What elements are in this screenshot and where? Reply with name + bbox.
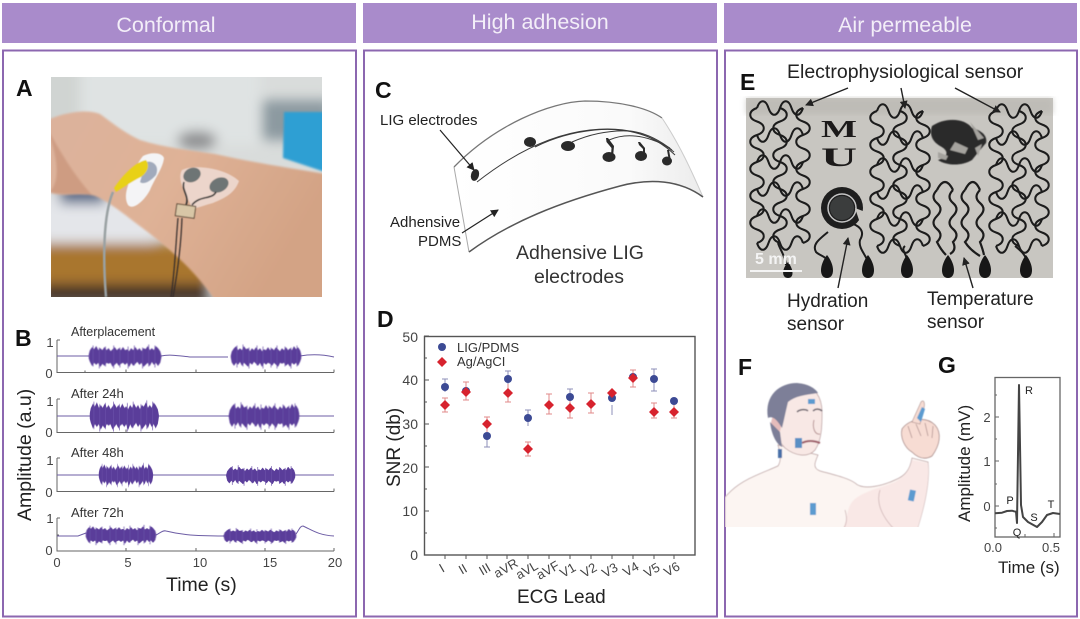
waveform peak labels: S <box>1030 512 1038 524</box>
x category labels: V2 <box>578 560 599 581</box>
trace: after 24h: 0 <box>45 425 53 440</box>
trace: after placement <box>45 325 334 381</box>
panel: high adhesion <box>364 50 717 616</box>
diagram: adhesive LIG electrode patch <box>380 101 703 288</box>
hydration sensor <box>821 187 868 229</box>
x category labels: V3 <box>599 560 620 581</box>
waveform peak labels: Q <box>1013 527 1022 539</box>
y tick labels <box>402 329 418 563</box>
chart: ECG waveform <box>955 378 1060 577</box>
label B: B <box>15 325 32 351</box>
trace: after 24h: 1 <box>46 394 54 409</box>
x category labels: I <box>436 561 447 576</box>
waveform peak labels: T <box>1048 499 1055 511</box>
label C: C <box>375 77 392 103</box>
LIG/PDMS points <box>441 373 678 440</box>
chart: amplitude over time at four wear durations <box>14 325 342 596</box>
rose logo <box>931 120 986 165</box>
sensor label: temperature: sensor <box>927 312 985 333</box>
callout: adhensive PDMS: Adhensive <box>390 214 460 231</box>
legend: Ag/AgCI <box>457 354 505 369</box>
heading: Air permeable: Air permeable <box>838 13 972 37</box>
label F: F <box>738 354 752 380</box>
Ag/AgCl points <box>440 373 679 454</box>
y axis title: SNR (db) <box>384 408 405 487</box>
chart: SNR per ECG lead <box>384 329 695 608</box>
serpentine tails and pads <box>778 222 1027 265</box>
diagram: adhesive LIG electrode patch: electrodes <box>534 266 624 288</box>
caption: Adhensive LIG <box>516 242 644 264</box>
sensor label: temperature: Temperature <box>927 289 1034 310</box>
y tick labels <box>983 410 991 514</box>
x category labels: aVF <box>534 558 562 583</box>
temperature sensor <box>934 182 984 256</box>
y tick labels: 1 <box>983 454 991 469</box>
heading: High adhesion: High adhesion <box>471 10 609 34</box>
x category labels: V6 <box>661 559 682 580</box>
electrophysiological meshes <box>750 101 810 250</box>
x axis title: Time (s) <box>166 574 237 596</box>
y tick labels: 50 <box>402 329 418 345</box>
x axis tick labels <box>53 555 342 570</box>
y axis title: Amplitude (mV) <box>955 405 974 522</box>
x axis tick labels: 20 <box>328 555 342 570</box>
trace: after placement: Afterplacement <box>71 325 156 339</box>
waveform peak labels: P <box>1006 495 1014 507</box>
blue sensors <box>778 399 925 515</box>
photo: printed sensor array: U <box>821 143 857 172</box>
trace: after 72h: After 72h <box>71 505 124 520</box>
y tick labels: 2 <box>983 410 991 425</box>
trace: after 72h: 1 <box>46 511 54 526</box>
x tick labels: 0.0 <box>984 540 1002 555</box>
hand <box>902 419 939 458</box>
label D: D <box>377 306 394 332</box>
photo: forearm with electrodes <box>51 77 322 297</box>
trace: after 24h: After 24h <box>71 386 124 401</box>
panel: air permeable <box>725 50 1077 616</box>
y tick labels: 10 <box>402 503 418 519</box>
trace: after 48h: 1 <box>46 453 54 468</box>
x axis title: Time (s) <box>998 558 1060 577</box>
label G: G <box>938 352 956 378</box>
x category labels: III <box>476 560 493 578</box>
head <box>780 392 823 456</box>
trace: after 72h: 0 <box>45 543 53 558</box>
panel: conformal <box>3 50 356 616</box>
hair <box>767 383 818 428</box>
sensor label: electrophysiological <box>787 61 1024 112</box>
legend <box>437 340 519 369</box>
x category labels: V4 <box>620 559 641 580</box>
x axis tick labels: 0 <box>53 555 61 570</box>
sensor label: hydration: sensor <box>787 314 845 335</box>
y tick labels: 20 <box>402 460 418 476</box>
y tick labels: 30 <box>402 416 418 432</box>
callout: adhensive PDMS: PDMS <box>418 233 461 250</box>
trace: after 48h: After 48h <box>71 445 124 460</box>
x category labels: V1 <box>557 560 578 581</box>
waveform peak labels <box>1006 385 1055 539</box>
sensor label: electrophysiological: Electrophysiological sensor <box>787 61 1024 83</box>
heading: High adhesion <box>363 3 717 43</box>
y axis title: Amplitude (a.u) <box>14 389 36 521</box>
y tick labels: 40 <box>402 372 418 388</box>
trace: after 72h <box>45 505 334 558</box>
heading: Conformal <box>2 3 356 43</box>
heading: Conformal: Conformal <box>116 13 216 37</box>
x category labels: V5 <box>641 560 662 581</box>
sensor label: hydration: Hydration <box>787 291 868 312</box>
legend: LIG/PDMS <box>457 340 519 355</box>
traces <box>477 129 675 182</box>
x category labels: II <box>456 561 470 577</box>
x category labels: aVR <box>491 555 520 581</box>
error bars <box>442 369 677 447</box>
photo: printed sensor array <box>746 98 1053 278</box>
x category labels: aVL <box>513 558 541 582</box>
MU logo: M <box>821 117 857 143</box>
label E: E <box>740 69 755 95</box>
label A: A <box>16 75 33 101</box>
sensor label: temperature <box>927 258 1034 333</box>
facial features <box>797 409 822 412</box>
x category labels <box>436 555 682 583</box>
music-note electrodes <box>470 137 672 182</box>
ear and neck shade <box>770 418 782 432</box>
x tick labels: 0.5 <box>1042 540 1060 555</box>
scale bar: 5 mm <box>755 251 797 268</box>
trace: after 48h <box>45 445 334 500</box>
x axis tick labels: 5 <box>124 555 132 570</box>
x tick labels <box>984 540 1060 555</box>
callout: LIG electrodes <box>380 112 478 170</box>
illustration: man wearing sensors <box>725 383 939 530</box>
callout: adhensive PDMS <box>390 210 498 250</box>
y tick labels: 0 <box>983 499 991 514</box>
trace: after placement: 0 <box>45 366 53 381</box>
ECG trace <box>995 385 1060 527</box>
waveform peak labels: R <box>1025 385 1033 397</box>
y tick labels: 0 <box>410 547 418 563</box>
trace: after 24h <box>45 386 334 440</box>
sensor label: hydration <box>787 238 868 335</box>
x axis tick labels: 15 <box>263 555 277 570</box>
trace: after placement: 1 <box>46 335 54 350</box>
heading: Air permeable <box>724 3 1077 43</box>
x axis title: ECG Lead <box>517 587 606 608</box>
callout: LIG electrodes: LIG electrodes <box>380 112 478 129</box>
trace: after 48h: 0 <box>45 485 53 500</box>
x axis tick labels: 10 <box>193 555 207 570</box>
